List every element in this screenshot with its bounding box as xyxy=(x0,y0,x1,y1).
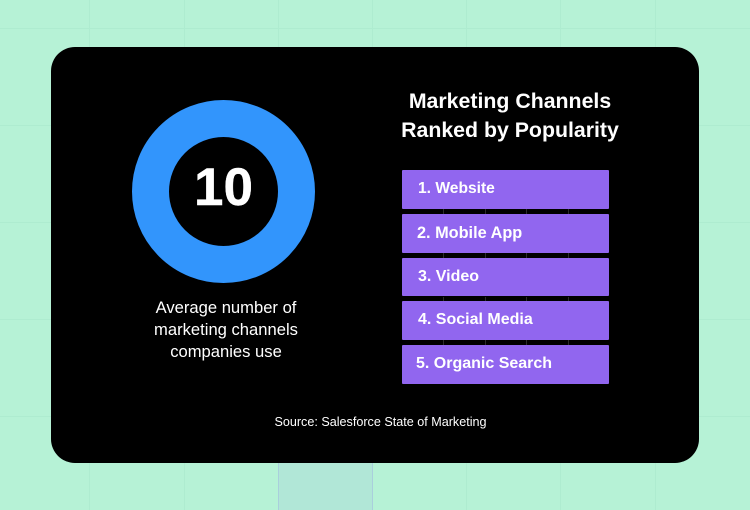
bar: Social Media: 4. Social Media xyxy=(418,311,533,328)
donut value: 10 xyxy=(194,158,253,217)
bar: Organic Search: 5. Organic Search xyxy=(416,355,552,372)
bar: Organic Search xyxy=(402,345,609,384)
ranked channel list xyxy=(402,170,609,384)
bar: Video: 3. Video xyxy=(418,268,479,284)
bar: Social Media xyxy=(402,301,609,340)
heading: Ranked by Popularity xyxy=(401,118,619,142)
donut caption: Average number of xyxy=(156,298,296,317)
bar: Website: 1. Website xyxy=(418,180,495,197)
heading: Marketing Channels xyxy=(409,89,611,113)
bar: Video xyxy=(402,258,609,296)
highlighted background cell xyxy=(278,463,373,510)
panel: main card xyxy=(51,47,699,463)
source note: Source: Salesforce State of Marketing xyxy=(274,415,487,429)
bar: Website xyxy=(402,170,609,208)
bar: Mobile App xyxy=(402,214,609,252)
donut chart: average channels xyxy=(132,100,315,283)
donut caption xyxy=(154,298,298,361)
bar: Mobile App: 2. Mobile App xyxy=(417,224,522,242)
donut caption: companies use xyxy=(170,342,282,361)
heading xyxy=(401,89,619,142)
donut caption: marketing channels xyxy=(154,320,298,339)
